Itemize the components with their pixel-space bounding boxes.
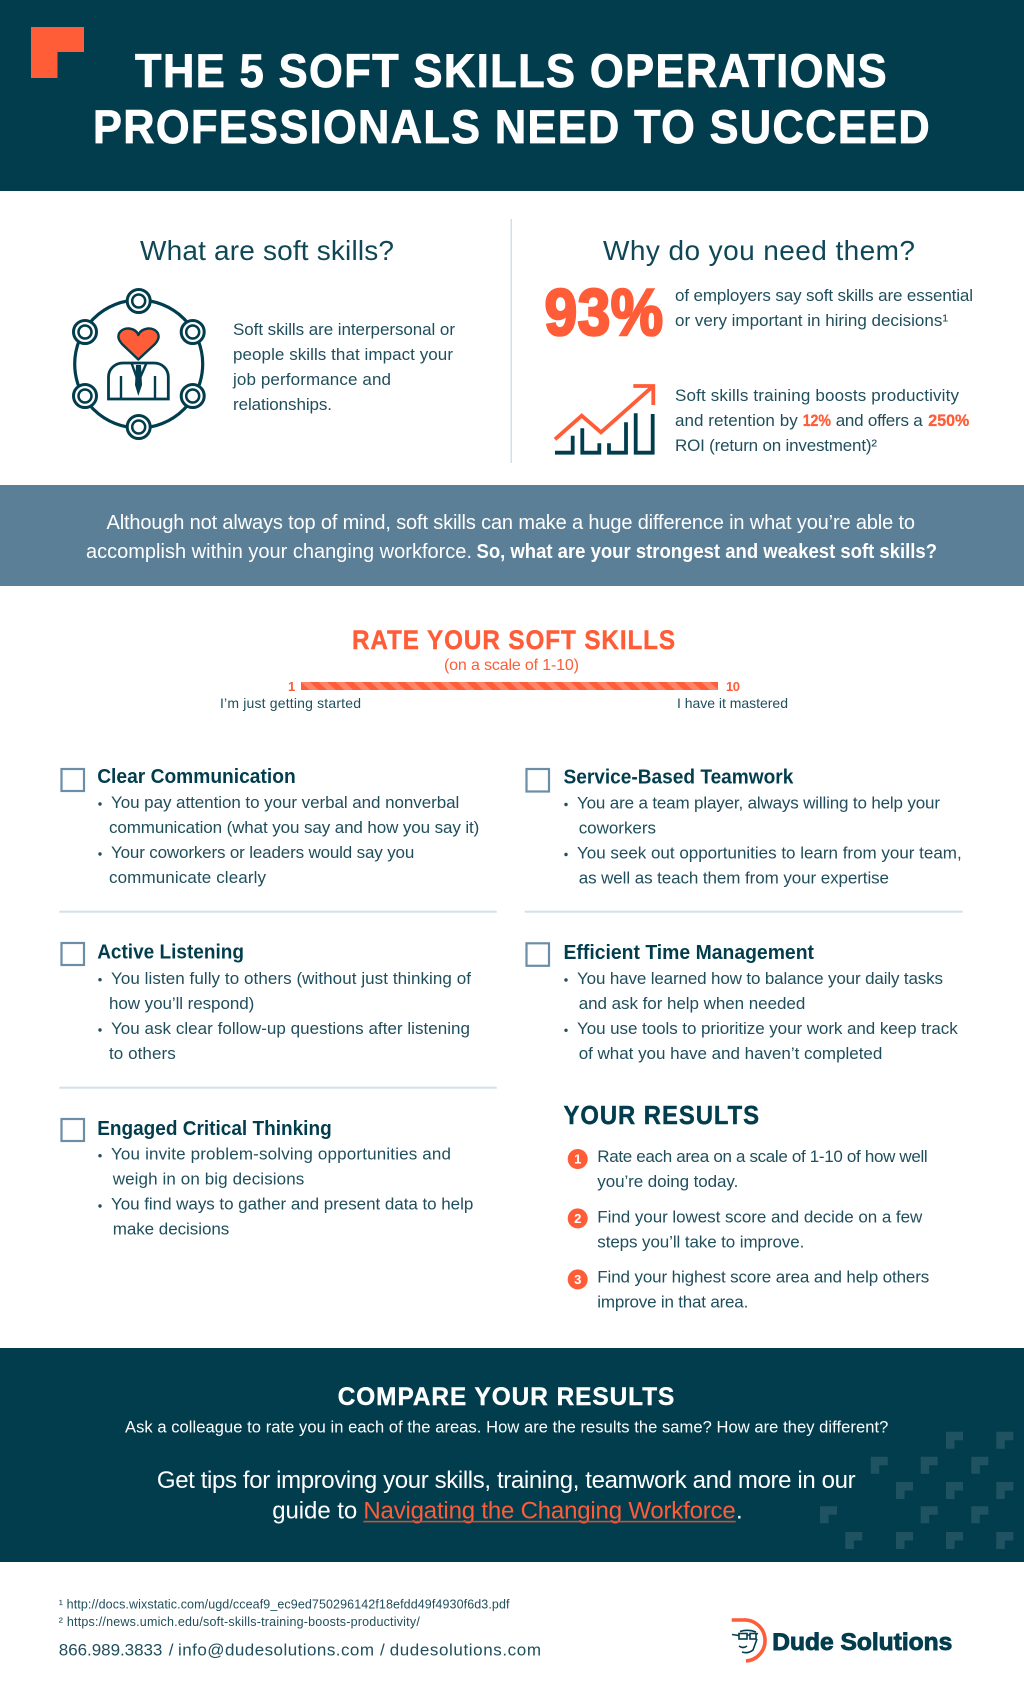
panel: why do you need them bbox=[544, 235, 973, 455]
step 2: 2 bbox=[574, 1211, 581, 1226]
panel: your results bbox=[564, 1102, 929, 1312]
bullet text: You use tools to prioritize your work and keep track bbox=[577, 1019, 958, 1038]
heading: COMPARE YOUR RESULTS bbox=[338, 1383, 675, 1411]
bullet text: as well as teach them from your expertise bbox=[579, 868, 889, 887]
wordmark: Dude Solutions bbox=[772, 1629, 952, 1656]
stat: 93%: 93% bbox=[544, 275, 664, 349]
bullet text: how you’ll respond) bbox=[109, 994, 254, 1013]
bullet text bbox=[564, 969, 958, 1063]
bullet text: communication (what you say and how you say it) bbox=[109, 818, 479, 837]
text: productivity: and retention by bbox=[675, 411, 798, 430]
step 3: 3 bbox=[574, 1272, 581, 1287]
panel: banner bbox=[0, 485, 1024, 586]
text: productivity: and offers a bbox=[836, 411, 923, 430]
bullet text: coworkers bbox=[579, 818, 656, 837]
step 1 bbox=[568, 1147, 928, 1191]
footer: footnotes: ¹ http://docs.wixstatic.com/ugd/cceaf9_ec9ed750296142f18efdd49f4930f6d3.pdf bbox=[59, 1597, 510, 1611]
bullet text bbox=[98, 1145, 473, 1239]
text: get tips: Navigating the Changing Workforce bbox=[363, 1497, 736, 1524]
heading: Engaged Critical Thinking bbox=[97, 1118, 332, 1140]
bullet text: You listen fully to others (without just thinking of bbox=[111, 969, 471, 988]
footer: contact: info@dudesolutions.com bbox=[178, 1640, 374, 1659]
bullet text: make decisions bbox=[113, 1220, 229, 1239]
icon: face with arc bbox=[732, 1620, 765, 1661]
panel: compare your results bbox=[0, 1348, 1024, 1562]
step 3: Find your highest score area and help others bbox=[597, 1268, 929, 1287]
text: employers: or very important in hiring decisions¹ bbox=[675, 311, 948, 330]
bullet text: You pay attention to your verbal and nonverbal bbox=[111, 793, 459, 812]
bullet text: of what you have and haven’t completed bbox=[579, 1044, 882, 1063]
heading: Service-Based Teamwork bbox=[564, 766, 794, 788]
step 2 bbox=[568, 1207, 923, 1251]
text: productivity: ROI (return on investment)² bbox=[675, 436, 877, 455]
text: productivity bbox=[675, 386, 969, 455]
heading: YOUR RESULTS bbox=[564, 1102, 760, 1130]
panel: banner: Although not always top of mind, soft skills can make a huge difference in what you’re able to bbox=[106, 512, 915, 534]
heading: RATE YOUR SOFT SKILLS bbox=[352, 625, 676, 655]
bullet text: communicate clearly bbox=[109, 868, 266, 887]
bullet text: You find ways to gather and present data to help bbox=[111, 1195, 473, 1214]
bullet text: weigh in on big decisions bbox=[112, 1170, 304, 1189]
checkbox bbox=[62, 769, 84, 791]
bullet text bbox=[564, 793, 962, 887]
step 2: steps you’ll take to improve. bbox=[597, 1232, 804, 1251]
text: productivity: 12% bbox=[803, 411, 831, 430]
checkbox bbox=[62, 943, 84, 965]
bullet text: You are a team player, always willing to help your bbox=[577, 793, 940, 812]
checkbox bbox=[62, 1119, 84, 1141]
bullet text: and ask for help when needed bbox=[579, 994, 805, 1013]
icon: people network with heart bbox=[74, 290, 204, 438]
text: get tips bbox=[157, 1467, 856, 1524]
panel: banner: accomplish within your changing workforce. bbox=[86, 541, 472, 563]
bullet text: You ask clear follow-up questions after listening bbox=[111, 1019, 470, 1038]
bullet text: Your coworkers or leaders would say you bbox=[111, 843, 414, 862]
title bbox=[93, 44, 931, 153]
text: productivity: Soft skills training boosts productivity bbox=[675, 386, 960, 405]
divider bbox=[59, 1087, 497, 1089]
title: THE 5 SOFT SKILLS OPERATIONS bbox=[135, 44, 888, 97]
panel: header bbox=[0, 0, 1024, 191]
skill: service-based teamwork bbox=[526, 766, 962, 887]
text: employers: of employers say soft skills are essential bbox=[675, 286, 973, 305]
heading: Active Listening bbox=[97, 942, 244, 964]
icon: growth chart bbox=[555, 386, 653, 453]
divider bbox=[525, 911, 963, 913]
step 2: Find your lowest score and decide on a few bbox=[597, 1207, 923, 1226]
footer: contact: / bbox=[169, 1640, 174, 1659]
panel: what are soft skills bbox=[74, 235, 455, 438]
heading: Clear Communication bbox=[97, 766, 296, 788]
logo: Dude Solutions bbox=[732, 1620, 952, 1661]
step 3 bbox=[568, 1268, 929, 1312]
text: productivity: 250% bbox=[928, 411, 969, 430]
text: get tips: . bbox=[736, 1497, 743, 1524]
heading: Efficient Time Management bbox=[564, 942, 814, 964]
footer: contact bbox=[59, 1640, 541, 1659]
panel: rating scale bbox=[220, 625, 788, 711]
checkbox bbox=[526, 769, 549, 792]
text: definition: job performance and bbox=[232, 370, 391, 389]
icon: orange logo corner bbox=[31, 27, 84, 78]
skill: clear communication bbox=[62, 766, 479, 887]
heading: What are soft skills? bbox=[140, 235, 394, 266]
text: definition: Soft skills are interpersonal or bbox=[233, 320, 455, 339]
bullet text: You have learned how to balance your daily tasks bbox=[577, 969, 943, 988]
title: PROFESSIONALS NEED TO SUCCEED bbox=[93, 100, 931, 153]
footer: footnotes bbox=[59, 1597, 510, 1629]
checkbox bbox=[526, 943, 549, 966]
text: employers bbox=[675, 286, 973, 330]
bullet text: You invite problem-solving opportunities and bbox=[111, 1145, 451, 1164]
divider bbox=[59, 911, 497, 913]
step 1: Rate each area on a scale of 1-10 of how well bbox=[597, 1147, 928, 1166]
scale bar bbox=[301, 682, 718, 690]
footer: footnotes: ² https://news.umich.edu/soft-skills-training-boosts-productivity/ bbox=[59, 1615, 420, 1629]
text: get tips: Get tips for improving your skills, training, teamwork and more in our bbox=[157, 1467, 856, 1494]
scale labels: 10 bbox=[726, 679, 740, 694]
bullet text: to others bbox=[109, 1044, 176, 1063]
text: definition: people skills that impact your bbox=[233, 345, 453, 364]
skill: active listening bbox=[62, 942, 471, 1063]
bullet text: You seek out opportunities to learn from your team, bbox=[577, 843, 962, 862]
scale labels: 1 bbox=[288, 679, 295, 694]
heading: Why do you need them? bbox=[603, 235, 915, 266]
scale labels bbox=[220, 679, 788, 711]
scale labels: I’m just getting started bbox=[220, 695, 361, 711]
scale labels: I have it mastered bbox=[677, 695, 788, 711]
skill: efficient time management bbox=[526, 942, 958, 1063]
step 1: 1 bbox=[574, 1152, 581, 1167]
decorative corner pattern bbox=[820, 1432, 1013, 1549]
footer: contact: dudesolutions.com bbox=[390, 1640, 541, 1659]
bullet text bbox=[98, 969, 471, 1063]
panel: banner: So, what are your strongest and weakest soft skills? bbox=[476, 541, 937, 563]
step 1: you’re doing today. bbox=[597, 1172, 738, 1191]
text: definition bbox=[232, 320, 455, 414]
bullet text bbox=[98, 793, 479, 887]
text: ask a colleague: Ask a colleague to rate you in each of the areas. How are the results the same? How are they different? bbox=[125, 1418, 888, 1436]
footer: contact: 866.989.3833 bbox=[59, 1640, 162, 1659]
skill: engaged critical thinking bbox=[62, 1118, 473, 1239]
text: definition: relationships. bbox=[233, 395, 332, 414]
divider bbox=[510, 219, 512, 463]
subheading: (on a scale of 1-10) bbox=[444, 657, 579, 674]
text: get tips: guide to bbox=[272, 1497, 357, 1524]
footer: contact: / bbox=[380, 1640, 385, 1659]
step 3: improve in that area. bbox=[597, 1293, 748, 1312]
